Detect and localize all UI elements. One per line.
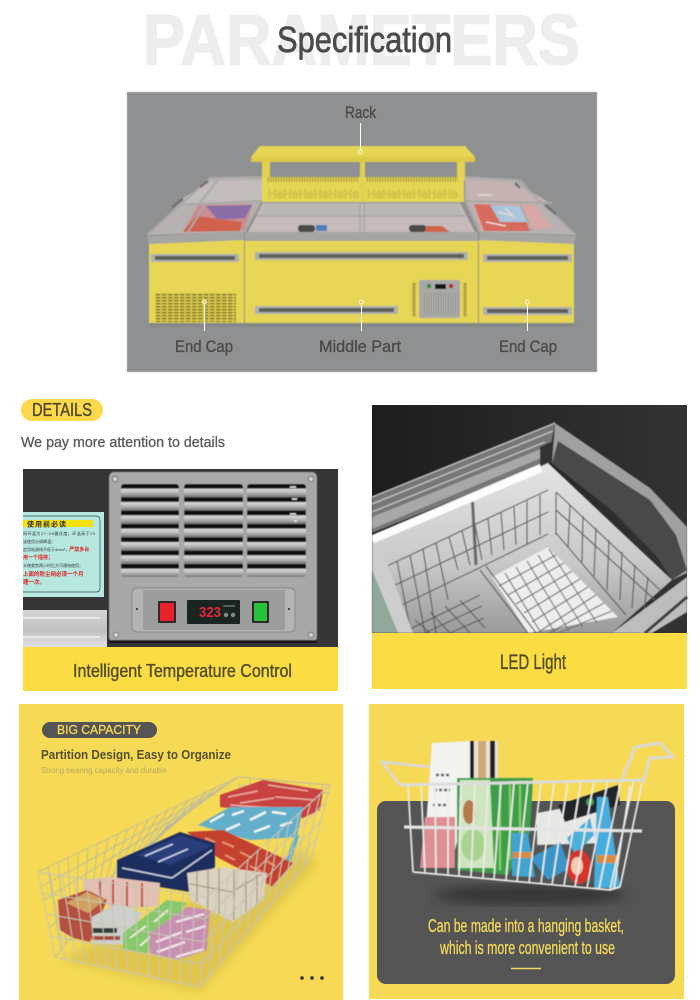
caption strip [23,647,338,691]
heading: Specification [277,19,452,60]
floor grid [492,547,618,633]
warning sticker: 用一个插排； [23,554,53,561]
ghost heading: PARAMETERS [143,2,580,80]
label: End Cap right [499,300,557,356]
vent grille [155,293,236,322]
panel: freezer specification [127,92,597,372]
warning sticker: 理一次。 [23,578,45,586]
caption text [428,916,624,968]
handle back left [382,762,430,785]
illustration: hanging basket [382,741,673,890]
label: Rack [345,103,376,154]
goods: green packs [123,900,187,953]
badge: BIG CAPACITY [57,723,142,737]
goods: cream trays [187,867,267,922]
control recess [132,588,295,632]
warning sticker: 使用前必读 [27,520,66,528]
goods: blue packs [198,807,303,873]
panel: hanging basket [369,704,684,999]
rack: HeHeHeHeHeHe [367,187,458,201]
caption strip [372,633,687,689]
panel background [127,92,597,372]
label: Middle Part: Middle Part [319,337,401,356]
lower-left wall frame [372,540,413,633]
label: End Cap right: End Cap [499,337,557,356]
caption text: which is more convenient to use [439,938,615,958]
photo: freezer interior [372,423,687,633]
dark card [377,801,675,984]
panel background [369,704,684,999]
title: Parameters / Specification [143,2,580,80]
LED tube [372,464,542,544]
goods: white packs [92,903,143,945]
digital display: 323 [199,604,221,621]
panel photo background [23,469,338,647]
red switch [158,601,176,623]
goods: red packs top [220,780,323,818]
label: End Cap left: End Cap [175,337,233,356]
lower-right frame [612,577,687,633]
label: Middle Part [319,300,401,356]
warning sticker: 半夜裁剪两小时后方可通电使用； [23,562,83,568]
panel: big capacity [19,704,343,1000]
caption text: LED Light [500,651,566,674]
basket wires [408,780,642,890]
label: Rack: Rack [345,103,376,122]
top frame arm [372,423,555,533]
details heading [21,399,225,451]
goods: red cup [567,850,591,884]
white trim bar [23,610,107,647]
illustration: freezer [147,146,576,323]
divider rod [472,502,476,565]
left floor section [408,595,485,633]
basket shadow [435,885,625,905]
label: End Cap left [175,300,233,356]
far side wires [38,777,330,957]
handle right [622,743,673,783]
goods: tan box [58,890,107,942]
warning sticker: 定用电源线不低于4mm²，严禁多台 [23,546,89,553]
left end cap glass [147,177,262,235]
digital display [187,600,240,624]
goods: wrapped pack [537,785,620,845]
warning sticker [23,512,104,597]
basket rims [400,780,642,785]
pagination dots [300,976,324,980]
right frame arm [552,423,687,580]
interior walls [372,463,672,633]
control unit [414,280,465,318]
illustration: wire basket with goods [38,777,330,992]
panel: intelligent temperature control [23,469,338,691]
caption text: Intelligent Temperature Control [73,661,292,681]
badge [42,722,157,738]
warning sticker: 网环温为27~28摄氏度，环温高于29 [23,530,96,536]
rack [251,146,475,202]
right end cap glass [465,177,576,235]
basket shadow [60,850,318,992]
goods: dark blue boxes [117,832,215,892]
goods: green packs [457,778,533,875]
goods: purple packs [150,907,210,960]
rims and bodies [147,232,576,323]
heading: Partition Design, Easy to Organize [41,747,231,762]
goods: red snacks [187,830,293,887]
handles [151,252,572,315]
goods: blue ice cream packs [512,797,620,888]
green switch [252,601,269,623]
subheading: Strong bearing capacity and durable [41,766,168,775]
floor shadow [150,322,575,327]
middle part glass [248,203,475,232]
warning sticker: 该使用分调降温； [23,538,55,544]
details subtitle: We pay more attention to details [21,434,225,451]
rack logo text: HeHeHeHeHeHe [268,187,359,201]
near side wires [38,785,330,987]
goods: white and tan boxes [423,741,498,868]
wire basket [385,490,660,633]
details pill [21,399,103,421]
goods: pink packs [83,877,160,907]
panel: LED light [372,405,687,689]
details pill text: DETAILS [32,400,92,420]
photo background [372,405,687,633]
panel background [19,704,343,1000]
vent plate [109,472,317,643]
warning sticker: 上面的防尘网必须一个月 [23,570,84,578]
goods: meat pack [420,817,455,868]
